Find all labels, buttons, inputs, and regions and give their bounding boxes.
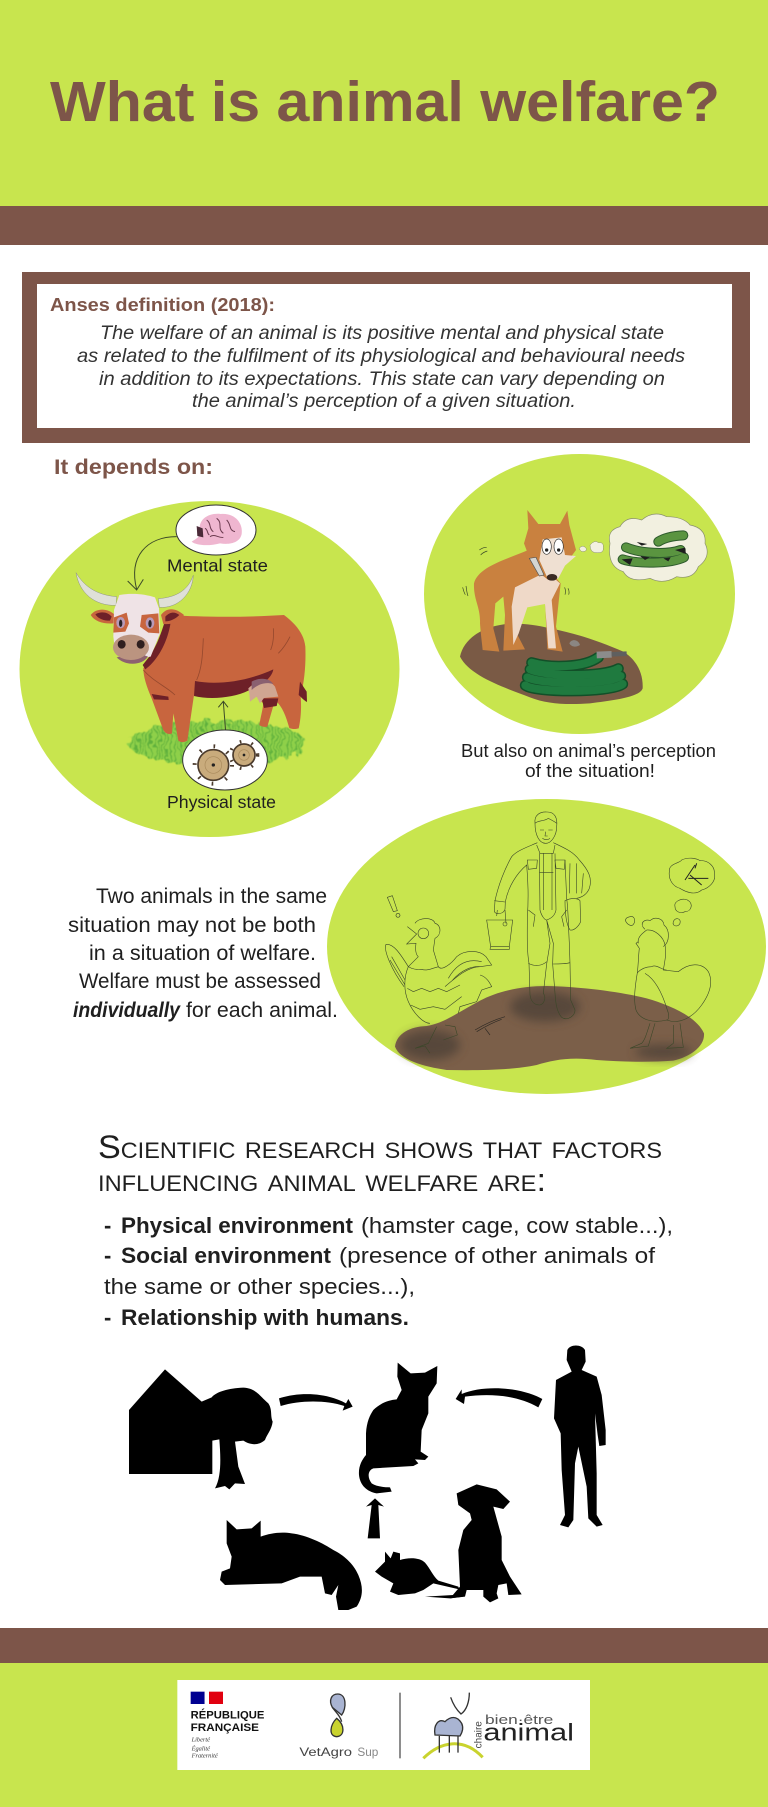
factors list: Social environment (121, 1243, 332, 1268)
arrow from human (456, 1388, 542, 1407)
mud (395, 986, 704, 1070)
individual assessment text: Two animals in the same (96, 885, 327, 908)
mud shadows (400, 992, 692, 1060)
dog caption: of the situation! (525, 761, 655, 781)
mental state arrow (128, 537, 177, 590)
garden hose (525, 654, 627, 691)
panel: Anses definition (22, 272, 750, 443)
panel: cow with mental and physical state (20, 501, 400, 837)
icon: sitting cat (359, 1363, 437, 1493)
hen (626, 858, 715, 1048)
logos panel (177, 1680, 590, 1770)
icon: man silhouette (554, 1345, 606, 1527)
factors heading (98, 1129, 662, 1198)
heading: it depends on: It depends on: (54, 456, 213, 479)
mental state label: Mental state (167, 556, 268, 576)
logo: VetAgro Sup (299, 1694, 379, 1759)
thought bubbles (579, 541, 603, 553)
individual assessment text: in a situation of welfare. (89, 942, 316, 965)
factors list: (hamster cage, cow stable...), (361, 1213, 673, 1238)
icon: house and tree (129, 1369, 273, 1489)
thought cloud with snake (609, 514, 707, 581)
icon: gears bubble (183, 730, 267, 790)
arrow from other animals (366, 1498, 384, 1538)
logo: chaire bien-être animal: chaire (474, 1721, 485, 1748)
logo: chaire bien-être animal: bien·être (485, 1712, 553, 1727)
individual assessment text: for each animal. (186, 999, 338, 1022)
footer (0, 1628, 768, 1807)
stones (569, 640, 580, 647)
arrow from environment (279, 1394, 353, 1411)
farmer (487, 812, 590, 1019)
logo: chaire bien-être animal (423, 1693, 574, 1758)
definition text: as related to the fulfilment of its physiological and behavioural needs (77, 345, 685, 367)
factors list: - (104, 1213, 111, 1238)
header band with title (0, 0, 768, 245)
factors list: Relationship with humans. (121, 1305, 409, 1330)
logo: VetAgro Sup: Sup (357, 1745, 379, 1759)
grass (127, 721, 310, 766)
icon: lying cat (220, 1520, 362, 1610)
physical state arrow (218, 701, 228, 732)
logo: République Française (191, 1692, 265, 1760)
logo: République Française: Égalité (191, 1745, 211, 1753)
logo: République Française: FRANÇAISE (191, 1722, 259, 1734)
scratch marks (475, 1017, 505, 1035)
definition text: in addition to its expectations. This state can vary depending on (99, 368, 665, 390)
title: What is animal welfare? (50, 70, 720, 134)
factors list: (presence of other animals of (339, 1243, 656, 1268)
individual assessment text: Welfare must be assessed (79, 970, 321, 993)
icon: brain bubble (176, 505, 256, 555)
dog caption (461, 741, 716, 781)
definition text: the animal’s perception of a given situation. (192, 390, 576, 412)
dog (474, 510, 576, 652)
rooster (386, 896, 492, 1053)
factors heading: Scientific research shows that factors (98, 1129, 662, 1165)
logo: République Française: Fraternité (191, 1753, 219, 1760)
cow (76, 573, 307, 742)
tremble marks (463, 547, 569, 596)
mud patch (460, 624, 643, 704)
factors list: - (104, 1305, 111, 1330)
logo: VetAgro Sup: VetAgro (299, 1745, 352, 1759)
factors heading: influencing animal welfare are: (98, 1162, 546, 1198)
individual assessment text: individually (73, 999, 181, 1022)
dog caption: But also on animal’s perception (461, 741, 716, 761)
factors list: - (104, 1243, 111, 1268)
factors list (104, 1213, 673, 1330)
panel: dog perception (424, 454, 735, 734)
logo: République Française: RÉPUBLIQUE (191, 1708, 265, 1721)
individual assessment text (68, 885, 338, 1022)
factors list: Physical environment (121, 1213, 354, 1238)
definition text (77, 322, 685, 412)
icon: mouse (375, 1552, 459, 1595)
panel: farmer and two chickens (327, 799, 766, 1094)
definition text: The welfare of an animal is its positive mental and physical state (100, 322, 664, 344)
definition heading: Anses definition (2018): (50, 295, 275, 315)
logo: République Française: Liberté (191, 1737, 211, 1744)
icon: sitting dog (450, 1484, 522, 1602)
silhouettes diagram (129, 1345, 606, 1610)
logo: chaire bien-être animal: animal (483, 1720, 574, 1747)
physical state label: Physical state (167, 792, 276, 812)
factors list: the same or other species...), (104, 1274, 415, 1299)
individual assessment text: situation may not be both (68, 914, 316, 937)
